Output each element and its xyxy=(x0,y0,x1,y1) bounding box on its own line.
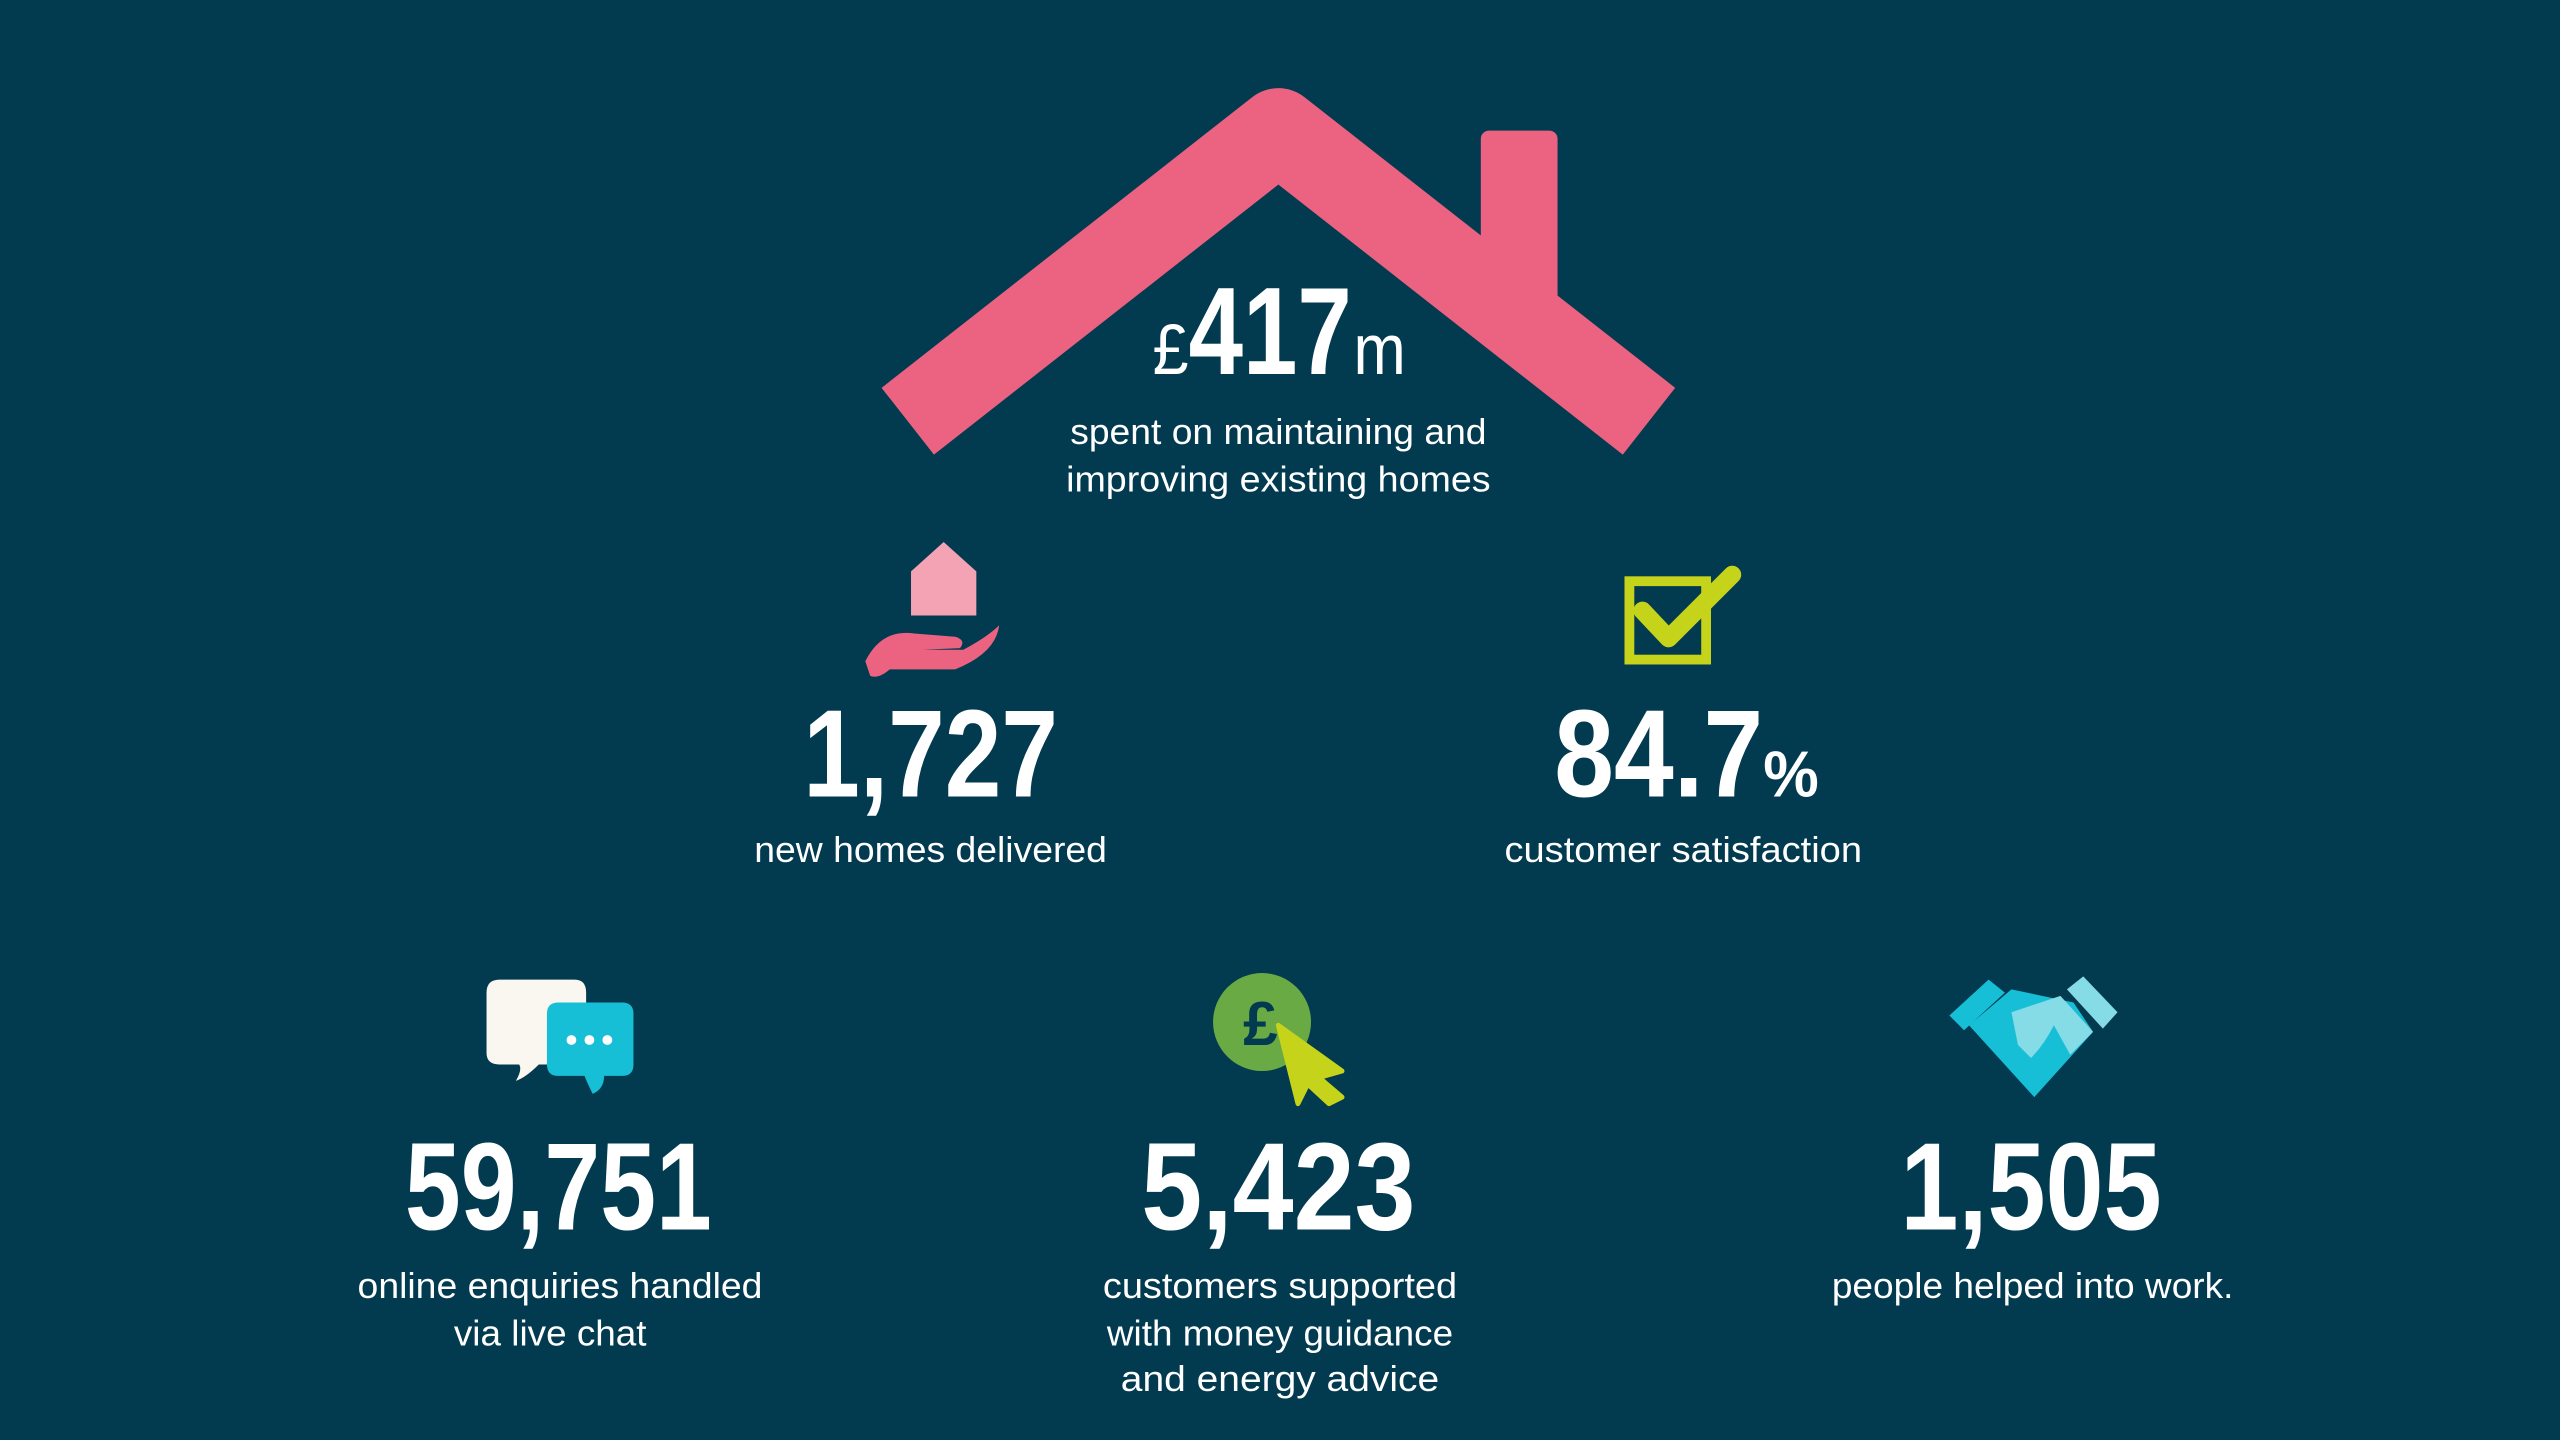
roof icon xyxy=(908,131,1649,421)
stat: 1,505 people into work xyxy=(1832,1118,2233,1306)
stat: 59,751 enquiries: online enquiries handled xyxy=(358,1265,762,1306)
icon: pound coin with cursor xyxy=(1213,973,1342,1104)
headline label: spent on maintaining and xyxy=(1070,411,1487,452)
stat: 84.7% satisfaction xyxy=(1504,686,1862,870)
icon: chat bubbles xyxy=(487,980,633,1094)
stat: 84.7% satisfaction: % xyxy=(1763,738,1819,811)
stat: 59,751 enquiries: 59,751 xyxy=(405,1118,712,1256)
icon: handshake xyxy=(1949,976,2118,1097)
stat: 59,751 enquiries xyxy=(358,1118,762,1353)
stat: 84.7% satisfaction: 84.7 xyxy=(1554,686,1763,824)
stat: 5,423 customers supported: customers supported xyxy=(1103,1265,1457,1306)
stat: 1,727 new homes: new homes delivered xyxy=(754,829,1107,870)
stat: 1,505 people into work: people helped into work. xyxy=(1832,1265,2233,1306)
icon: checkbox xyxy=(1629,575,1732,660)
stat: 5,423 customers supported: and energy advice xyxy=(1121,1358,1439,1399)
headline label: improving existing homes xyxy=(1066,458,1491,499)
headline stat: £417m: £ xyxy=(1153,310,1189,390)
icon: pound coin with cursor: £ xyxy=(1243,990,1278,1059)
stat: 84.7% satisfaction: customer satisfaction xyxy=(1504,829,1862,870)
icon: hand holding house xyxy=(865,542,999,677)
headline stat: £417m: 417 xyxy=(1189,263,1352,401)
headline stat: £417m: m xyxy=(1353,310,1406,390)
stat: 1,727 new homes: 1,727 xyxy=(803,686,1058,824)
stat: 5,423 customers supported xyxy=(1103,1118,1457,1399)
stat: 1,727 new homes xyxy=(754,686,1107,870)
stat: 1,505 people into work: 1,505 xyxy=(1900,1118,2162,1256)
stat: 5,423 customers supported: 5,423 xyxy=(1141,1118,1416,1256)
stat: 59,751 enquiries: via live chat xyxy=(454,1312,647,1353)
stat: 5,423 customers supported: with money guidance xyxy=(1106,1312,1453,1353)
headline label xyxy=(1066,411,1491,499)
